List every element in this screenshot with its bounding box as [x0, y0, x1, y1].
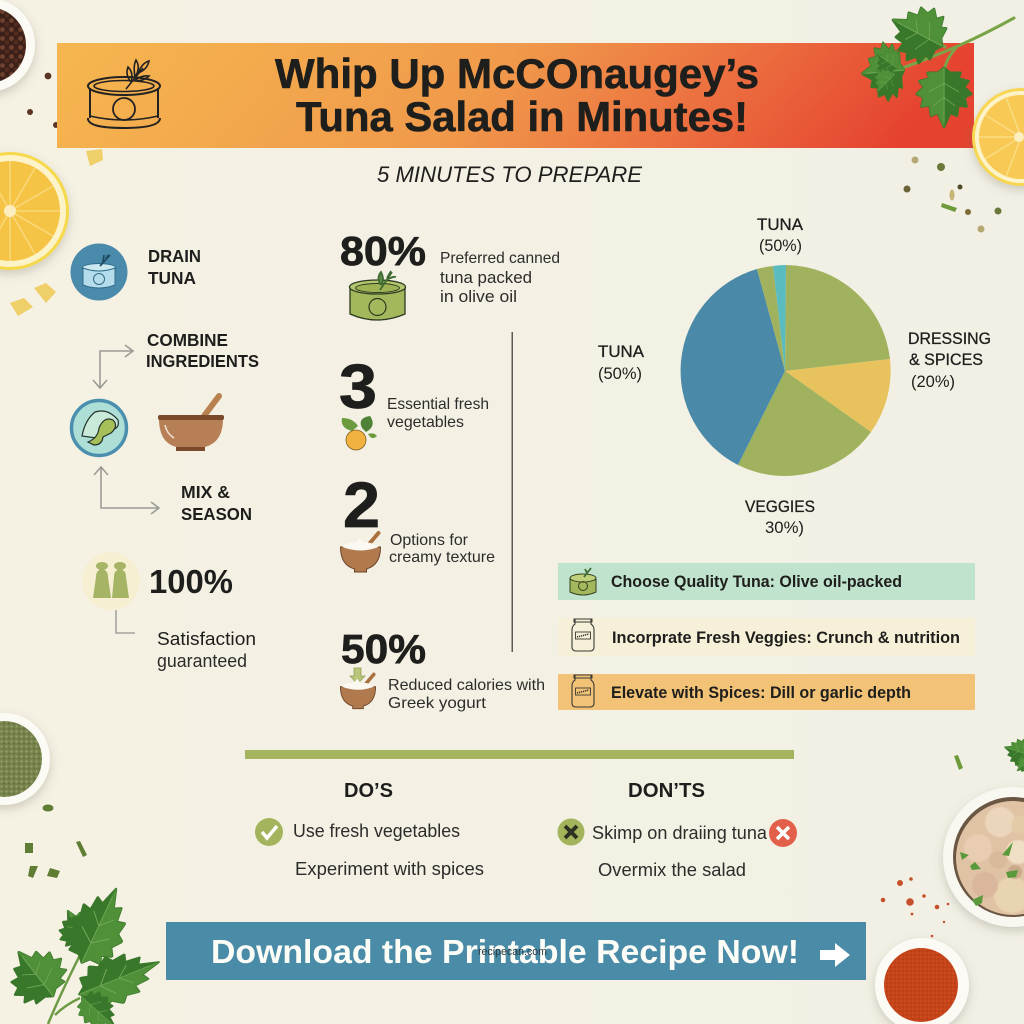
- decoration: parsley right edge: [954, 734, 1024, 777]
- decoration: pepper bowl: [0, 0, 59, 128]
- icon: down arrow: [350, 668, 365, 684]
- icon: mixing bowl: [158, 396, 224, 451]
- caption: Essential fresh: [387, 396, 489, 413]
- stat: 3 vegetables: [339, 353, 489, 450]
- tip: spices: [558, 674, 975, 710]
- do's column: Experiment with spices: [295, 859, 484, 879]
- icon: yogurt bowl: [340, 674, 376, 709]
- subtitle: 5 MINUTES TO PREPARE: [377, 162, 642, 187]
- stat: 3 vegetables: 3: [339, 353, 377, 422]
- title banner: [57, 43, 974, 148]
- pie label: dressing and spices: [908, 329, 991, 391]
- arrow: [93, 345, 133, 388]
- download button: Download the Printable Recipe Now!: [211, 933, 799, 970]
- don'ts column: [558, 780, 797, 880]
- title text: Whip Up McCOnaugey’s: [275, 50, 759, 97]
- label: MIX &: [181, 482, 230, 502]
- decoration: parsley bottom left: [0, 878, 167, 1024]
- title text: [275, 50, 759, 140]
- caption: tuna packed: [440, 268, 532, 287]
- pie label: dressing and spices: DRESSING: [908, 329, 991, 348]
- caption: [440, 250, 560, 306]
- pie label: left tuna: TUNA: [598, 342, 645, 361]
- icon: bowl of yogurt: [340, 533, 380, 572]
- do's column: Use fresh vegetables: [293, 821, 460, 841]
- label: COMBINE: [147, 330, 228, 350]
- stat: 50 percent: [340, 626, 545, 712]
- tip: spices: Elevate with Spices: Dill or garlic depth: [611, 683, 911, 702]
- arrow: [94, 467, 159, 514]
- pie label: veggies: [745, 497, 815, 537]
- label: [148, 246, 201, 288]
- stat: 2 options: [340, 469, 495, 572]
- stat: 50 percent: 50%: [341, 626, 426, 672]
- caption: [388, 677, 545, 712]
- caption: [387, 396, 489, 431]
- icon: can in blue circle: [70, 244, 128, 300]
- pie label: veggies: VEGGIES: [745, 497, 815, 516]
- decoration: paprika bowl: [875, 877, 969, 1024]
- title text: Tuna Salad in Minutes!: [296, 93, 748, 140]
- label: INGREDIENTS: [146, 351, 259, 371]
- icon: salt shakers: [82, 552, 140, 610]
- pie chart: [681, 265, 891, 476]
- pie label: dressing and spices: & SPICES: [909, 350, 983, 369]
- pie label: left tuna: (50%): [598, 364, 642, 383]
- caption: [389, 532, 495, 566]
- step: combine ingredients: [72, 330, 259, 456]
- do's column: [255, 780, 484, 879]
- decoration: tuna salad bowl: [943, 787, 1024, 927]
- caption: Reduced calories with: [388, 677, 545, 694]
- download button: [166, 922, 866, 980]
- stat: 100 percent satisfaction: 100%: [149, 563, 233, 600]
- step: drain tuna: [70, 244, 201, 300]
- decoration: herb bowl: [0, 713, 87, 878]
- icon: jar: [572, 619, 594, 651]
- decoration: lemon right: [972, 88, 1024, 186]
- icon: red cross: [769, 819, 797, 847]
- stat: 80 percent: 80%: [340, 228, 426, 274]
- label: SEASON: [181, 504, 252, 524]
- caption: Satisfaction: [157, 629, 256, 649]
- caption: Preferred canned: [440, 250, 560, 267]
- tip: choose quality tuna: Choose Quality Tuna: Olive oil-packed: [611, 572, 902, 591]
- caption: vegetables: [387, 414, 464, 431]
- caption: guaranteed: [157, 651, 247, 671]
- caption: creamy texture: [389, 549, 495, 566]
- pie label: top tuna: (50%): [759, 236, 802, 255]
- icon: lettuce: [72, 400, 126, 456]
- label: [146, 330, 259, 371]
- step: mix and season: [94, 467, 252, 524]
- don'ts column: DON’TS: [628, 780, 705, 802]
- icon: tuna can: [570, 568, 596, 595]
- stat: 80 percent: [340, 228, 560, 320]
- icon: tuna can: [88, 60, 160, 128]
- tip: fresh veggies: [558, 618, 975, 656]
- icon: jar: [572, 675, 594, 707]
- stat: 100 percent satisfaction: [82, 552, 256, 671]
- pie label: veggies: 30%): [765, 518, 804, 537]
- caption: Greek yogurt: [388, 695, 487, 712]
- label: TUNA: [148, 268, 196, 288]
- pie label: left tuna: [598, 342, 645, 383]
- icon: check: [255, 818, 283, 846]
- decoration: seeds: [904, 156, 1002, 232]
- icon: green can: [350, 271, 406, 320]
- don'ts column: Overmix the salad: [598, 860, 746, 880]
- pie label: top tuna: [757, 215, 804, 255]
- decoration: parsley top right: [860, 0, 1014, 127]
- label: DRAIN: [148, 246, 201, 266]
- pie label: top tuna: TUNA: [757, 215, 804, 234]
- caption: Options for: [390, 532, 469, 549]
- caption: [157, 629, 256, 671]
- vertical divider: [512, 332, 513, 652]
- stat: 2 options: 2: [343, 469, 380, 541]
- decoration: butter cubes: [10, 149, 103, 316]
- pie label: dressing and spices: (20%): [911, 372, 955, 391]
- caption: in olive oil: [440, 287, 517, 306]
- icon: dark cross: [558, 818, 584, 846]
- decoration: lemon left: [0, 152, 69, 270]
- tip: fresh veggies: Incorprate Fresh Veggies: Crunch & nutrition: [612, 628, 960, 647]
- do's column: DO’S: [344, 780, 393, 802]
- icon: lemon and leaves: [342, 416, 377, 450]
- green rule: [245, 750, 794, 759]
- label: [181, 482, 252, 524]
- tip: choose quality tuna: [558, 563, 975, 600]
- don'ts column: Skimp on draiing tuna: [592, 823, 768, 843]
- download button: recipecan.com: [478, 946, 547, 958]
- icon: arrow: [820, 943, 850, 967]
